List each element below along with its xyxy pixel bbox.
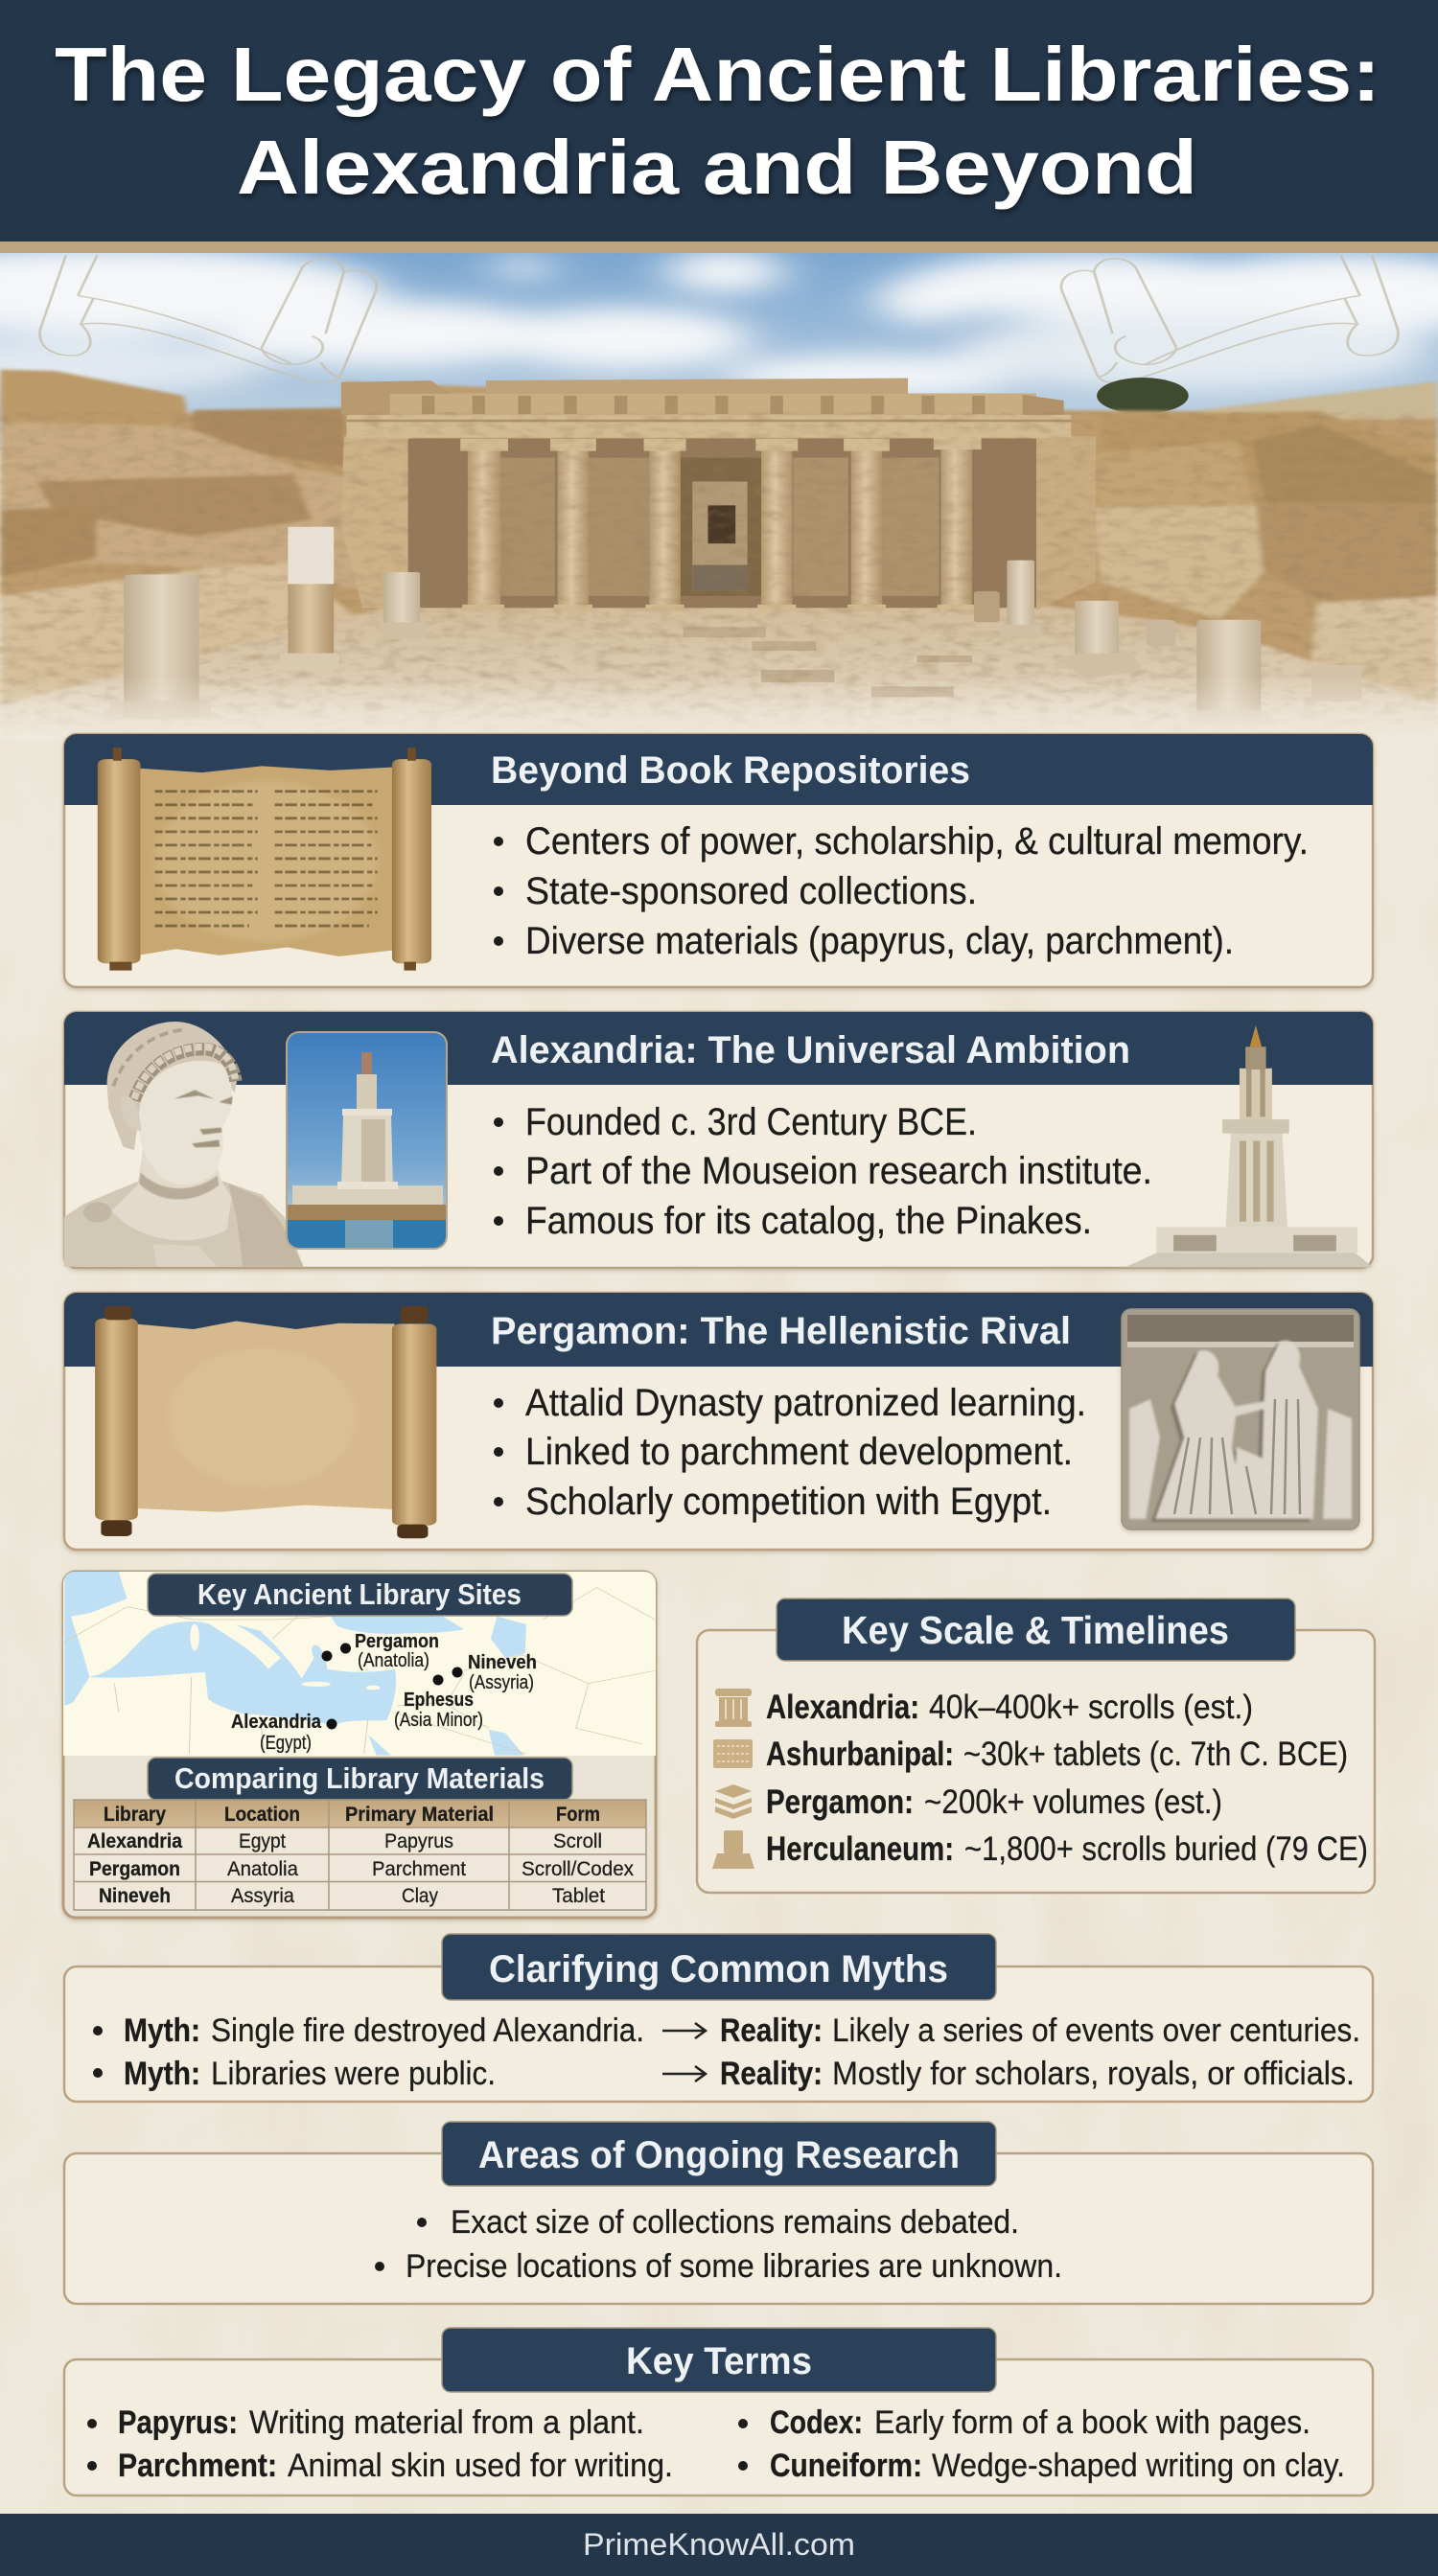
map markers and labels: Ephesus [404,1690,474,1711]
row: public myth: Myth: [124,2056,200,2092]
table: comparing library materials: Pergamon [89,1858,180,1880]
panel: Pergamon [64,1293,1373,1550]
table: comparing library materials: Assyria [231,1885,294,1907]
row: Herculaneum [766,1830,1368,1868]
table: comparing library materials: Location [224,1804,300,1826]
broken foreground columns [110,527,1362,724]
row: fire myth [93,2012,1360,2049]
bullet list: Founded c. 3rd Century BCE. [525,1101,977,1143]
row: fire myth: Single fire destroyed Alexandria. [211,2012,644,2049]
icon: scroll in tray [712,1830,754,1869]
icon: lighthouse illustration [1125,1025,1373,1267]
map heading pill [148,1574,572,1616]
bullet list: Diverse materials (papyrus, clay, parchment). [525,920,1234,962]
fade into parchment [0,676,1438,741]
panel: Clarifying Common Myths [64,1934,1373,2102]
bullet list: Centers of power, scholarship, & cultural memory. [525,820,1309,862]
stone grain texture [0,412,1438,741]
map markers and labels: Alexandria [231,1712,322,1733]
row: Ashurbanipal: Ashurbanipal: [766,1736,954,1773]
table: comparing library materials: Scroll [553,1830,602,1852]
bullet list [375,2204,1062,2285]
hero photo: excavated library ruins [0,245,1438,741]
map markers and labels [231,1631,537,1754]
bullet list: Exact size of collections remains debated. [451,2204,1019,2241]
heading pill [442,2328,996,2392]
heading pill [777,1598,1295,1661]
map markers and labels: Pergamon [355,1631,439,1652]
footer [0,2514,1438,2576]
icon: written papyrus scroll [98,748,431,971]
heading pill: Key Terms [626,2340,812,2382]
table: comparing library materials [74,1800,646,1910]
table: comparing library materials: Form [556,1804,600,1826]
map markers and labels: Nineveh [468,1652,537,1673]
bullet list [494,1382,1086,1523]
distant tree [1097,378,1189,414]
panel: Alexandria [64,1012,1373,1268]
bullet list: State-sponsored collections. [525,870,977,912]
table: comparing library materials: Tablet [552,1885,605,1907]
panel: Key Scale & Timelines [697,1598,1375,1893]
table: comparing library materials: Alexandria [87,1830,182,1852]
title text: The Legacy of Ancient Libraries: [55,32,1380,117]
title text [55,32,1380,210]
term: Cuneiform: Wedge-shaped writing on clay. [932,2448,1345,2484]
bullet list: Attalid Dynasty patronized learning. [525,1382,1086,1424]
bullet list [494,1101,1152,1242]
icon: clay tablet [713,1739,753,1768]
row: public myth: Libraries were public. [211,2056,496,2092]
table: comparing library materials: Egypt [239,1830,286,1852]
footer: PrimeKnowAll.com [583,2527,855,2562]
row: Pergamon [766,1783,1222,1821]
icon: book stack [715,1784,752,1819]
table: comparing library materials: Primary Material [345,1804,494,1826]
ruin ground mass [0,370,1438,732]
table: comparing library materials: Nineveh [99,1885,171,1907]
term: Codex: Early form of a book with pages. [874,2404,1310,2441]
panel: map and materials table [63,1572,656,1918]
photo: lighthouse at harbour [286,1031,448,1250]
bullet list: Part of the Mouseion research institute. [525,1150,1152,1192]
heading: Pergamon: The Hellenistic Rival [491,1310,1071,1352]
bullet list: Linked to parchment development. [525,1431,1073,1473]
row: Ashurbanipal: ~30k+ tablets (c. 7th C. BCE) [963,1736,1348,1773]
title text: Alexandria and Beyond [237,125,1197,210]
heading pill [442,1934,996,2000]
map markers and labels: (Asia Minor) [394,1710,483,1731]
heading pill [442,2122,996,2186]
colonnade [460,436,982,612]
panel: Areas of Ongoing Research [64,2122,1373,2304]
row: fire myth: Myth: [124,2012,200,2049]
term: Parchment [87,2448,673,2484]
row: fire myth: Likely a series of events over centuries. [832,2012,1360,2049]
row: public myth: Mostly for scholars, royals, or officials. [832,2056,1355,2092]
floor rubble [684,627,972,697]
row: Pergamon: Pergamon: [766,1783,914,1821]
heading pill: Areas of Ongoing Research [478,2134,960,2176]
table: comparing library materials: Papyrus [384,1830,453,1852]
clouds in the sky [0,245,1438,398]
map markers and labels: (Egypt) [260,1733,312,1754]
bullet list: Scholarly competition with Egypt. [525,1481,1052,1523]
map: eastern Mediterranean [63,1572,656,1756]
faint scroll sketch left [40,255,377,382]
map markers and labels: (Assyria) [469,1672,534,1693]
row: public myth [93,2056,1355,2092]
table: comparing library materials: Clay [402,1885,438,1907]
table: comparing library materials: Scroll/Codex [522,1858,634,1880]
row: public myth: Reality: [720,2056,823,2092]
row: fire myth: Reality: [720,2012,823,2049]
term: Parchment: Animal skin used for writing. [288,2448,673,2484]
heading: Alexandria: The Universal Ambition [491,1029,1130,1071]
icon: column scroll [715,1689,752,1727]
title banner [0,0,1438,253]
term: Cuneiform [738,2448,1345,2484]
term: Parchment: Parchment: [118,2448,277,2484]
term: Papyrus: Papyrus: [118,2404,238,2441]
table heading pill: Comparing Library Materials [174,1761,545,1795]
temple facade [341,436,412,608]
faint scroll sketch right [1061,255,1398,382]
bullet list [494,820,1309,962]
table: comparing library materials: Anatolia [227,1858,298,1880]
row: Alexandria: 40k–400k+ scrolls (est.) [929,1689,1253,1726]
row: Herculaneum: ~1,800+ scrolls buried (79 CE) [964,1830,1368,1868]
table: comparing library materials: Parchment [372,1858,466,1880]
term: Papyrus [87,2404,644,2441]
image: marble relief frieze [1122,1309,1359,1530]
row: Herculaneum: Herculaneum: [766,1830,954,1868]
icon: marble bust [64,1022,304,1267]
row: Pergamon: ~200k+ volumes (est.) [924,1783,1222,1821]
heading pill: Key Scale & Timelines [842,1608,1229,1652]
row: Alexandria: Alexandria: [766,1689,919,1726]
bullet list: Precise locations of some libraries are unknown. [406,2248,1062,2285]
term: Papyrus: Writing material from a plant. [249,2404,644,2441]
map heading pill: Key Ancient Library Sites [197,1577,522,1611]
heading pill: Clarifying Common Myths [489,1948,948,1990]
term: Cuneiform: Cuneiform: [770,2448,922,2484]
panel: Key Terms [64,2328,1373,2496]
bullet list: Famous for its catalog, the Pinakes. [525,1200,1092,1242]
table: comparing library materials: Library [104,1804,166,1826]
panel: Beyond Book Repositories [64,734,1373,987]
icon: blank parchment scroll [95,1306,436,1538]
row: Alexandria [766,1689,1253,1726]
map markers and labels: (Anatolia) [358,1650,429,1671]
heading: Beyond Book Repositories [491,749,970,792]
term: Codex: Codex: [770,2404,863,2441]
row: Ashurbanipal [766,1736,1348,1773]
